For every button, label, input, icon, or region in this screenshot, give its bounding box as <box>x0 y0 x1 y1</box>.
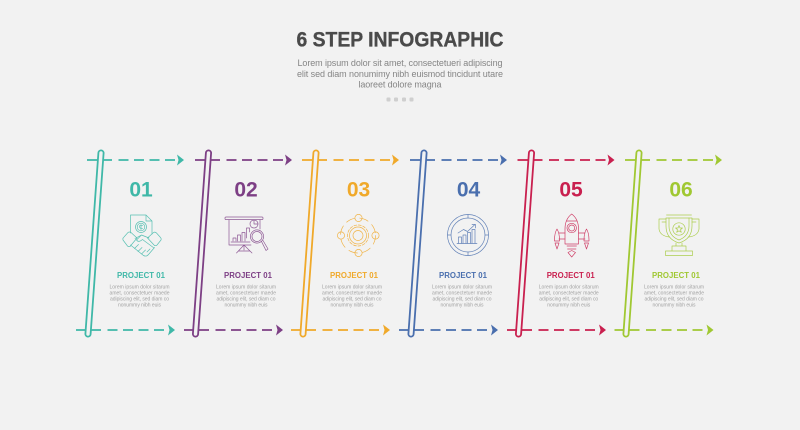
icon: handshake and invoice <box>123 215 161 256</box>
number 06: 06 <box>669 178 693 202</box>
slanted bar 02 <box>196 153 208 334</box>
number 04: 04 <box>457 178 480 202</box>
description 04: nonummy nibh euis <box>440 302 484 308</box>
description 01: amet, consectetuer maede <box>110 290 170 296</box>
icon: rocket <box>554 214 589 257</box>
arrow: bottom dashed 01 <box>76 324 175 336</box>
number 05: 05 <box>559 178 583 202</box>
description 05: amet, consectetuer maede <box>539 290 599 296</box>
project label 03: PROJECT 01 <box>330 271 379 280</box>
panel: step 03 <box>291 153 399 336</box>
arrow: bottom dashed 03 <box>291 324 390 336</box>
arrow: top dashed 06 <box>625 154 722 166</box>
panel: step 02 <box>184 153 292 336</box>
description 03: amet, consectetuer maede <box>322 290 382 296</box>
description 02: nonummy nibh euis <box>224 302 268 308</box>
description 06 <box>644 284 704 308</box>
description 03: adipiscing elit, sed diam co <box>322 296 382 302</box>
description 03 <box>322 284 382 308</box>
arrow: top dashed 03 <box>302 154 399 166</box>
number 01: 01 <box>129 178 153 202</box>
description 05 <box>539 284 599 308</box>
description 02: adipiscing elit, sed diam co <box>216 296 276 302</box>
description 05: nonummy nibh euis <box>547 302 591 308</box>
icon: presentation board with magnifier <box>225 217 268 253</box>
description 03: Lorem ipsum dolor sitarum <box>322 284 382 290</box>
icon: growth chart in ring <box>448 214 488 256</box>
description 06: adipiscing elit, sed diam co <box>644 296 704 302</box>
slanted bar 03 <box>303 153 316 334</box>
project label 01: PROJECT 01 <box>117 271 166 280</box>
description 05: Lorem ipsum dolor sitarum <box>539 284 599 290</box>
description 05: adipiscing elit, sed diam co <box>539 296 598 302</box>
arrow: bottom dashed 02 <box>184 324 283 336</box>
arrow: top dashed 04 <box>410 154 507 166</box>
description 04: Lorem ipsum dolor sitarum <box>432 284 492 290</box>
title: 6 STEP INFOGRAPHIC <box>296 28 504 52</box>
slanted bar 04 <box>411 153 424 334</box>
description 03: nonummy nibh euis <box>330 302 374 308</box>
description 04: adipiscing elit, sed diam co <box>432 296 492 302</box>
number 03: 03 <box>347 178 370 202</box>
intro text block: elit sed diam nonumimy nibh euismod tincidunt utare <box>297 69 503 79</box>
panel: step 01 <box>76 153 184 336</box>
slanted bar 06 <box>626 153 639 334</box>
icon: trophy <box>659 215 699 256</box>
description 04: amet, consectetuer maede <box>432 290 492 296</box>
description 06: Lorem ipsum dolor sitarum <box>644 284 704 290</box>
panel: step 05 <box>507 153 614 336</box>
arrow: top dashed 05 <box>518 154 614 166</box>
pagination dots <box>386 98 414 102</box>
number 02: 02 <box>234 178 258 202</box>
intro text block: Lorem ipsum dolor sit amet, consectetueri adipiscing <box>298 58 502 68</box>
description 06: nonummy nibh euis <box>652 302 696 308</box>
project label 05: PROJECT 01 <box>547 271 595 280</box>
description 01: Lorem ipsum dolor sitarum <box>110 284 170 290</box>
slanted bar 01 <box>88 153 101 334</box>
project label 04: PROJECT 01 <box>439 271 488 280</box>
slanted bar 05 <box>518 153 532 334</box>
arrow: bottom dashed 06 <box>614 324 714 336</box>
description 02: Lorem ipsum dolor sitarum <box>216 284 276 290</box>
intro text block <box>297 58 503 90</box>
project label 06: PROJECT 01 <box>652 271 701 280</box>
intro text block: laoreet dolore magna <box>358 80 442 90</box>
panel: step 06 <box>614 153 722 336</box>
description 01: adipiscing elit, sed diam co <box>110 296 169 302</box>
arrow: bottom dashed 05 <box>507 324 606 336</box>
arrow: top dashed 01 <box>87 154 184 166</box>
description 06: amet, consectetuer maede <box>644 290 704 296</box>
description 01 <box>110 284 170 308</box>
arrow: top dashed 02 <box>195 154 292 166</box>
arrow: bottom dashed 04 <box>399 324 498 336</box>
description 02 <box>216 284 276 308</box>
description 04 <box>432 284 492 308</box>
description 02: amet, consectetuer maede <box>216 290 276 296</box>
description 01: nonummy nibh euis <box>118 302 162 308</box>
panel: step 04 <box>399 153 507 336</box>
project label 02: PROJECT 01 <box>224 271 273 280</box>
icon: gear with orbit <box>337 214 379 257</box>
